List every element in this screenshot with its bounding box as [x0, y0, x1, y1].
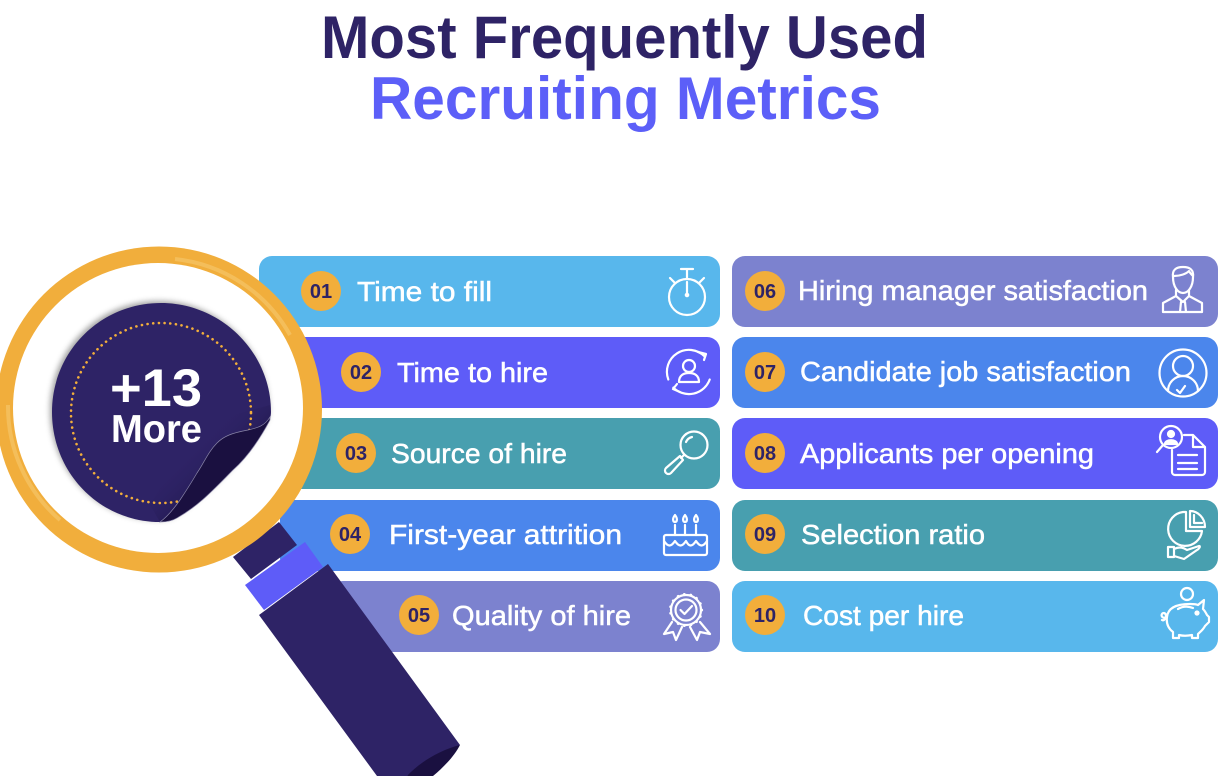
metric 06 hiring manager satisfaction: Hiring manager satisfaction: [798, 275, 1148, 306]
icon: cycle person: [667, 350, 710, 394]
sticker +13 more: [50, 301, 271, 522]
metric 02 time to hire: Time to hire: [397, 357, 548, 388]
title: Most Frequently Used: [321, 4, 928, 71]
icon: applicant document: [1157, 426, 1205, 475]
title: [321, 4, 928, 132]
metric 09 selection ratio: Selection ratio: [801, 519, 985, 550]
metric 05 quality of hire: Quality of hire: [452, 600, 631, 631]
metric 07 candidate job satisfaction: Candidate job satisfaction: [800, 356, 1131, 387]
metric 10 cost per hire: 10: [754, 605, 776, 627]
icon: magnifying glass: [665, 432, 708, 474]
metric 07 candidate job satisfaction: 07: [754, 362, 776, 384]
metric 10 cost per hire: [732, 581, 1218, 652]
magnifying glass: [0, 246, 460, 776]
metric 05 quality of hire: 05: [408, 605, 430, 627]
metric 02 time to hire: 02: [350, 362, 372, 384]
metric 03 source of hire: Source of hire: [391, 438, 567, 469]
icon: award rosette: [664, 594, 710, 640]
metric 01 time to fill: 01: [310, 281, 332, 303]
sticker text: More: [111, 408, 202, 451]
sticker text: [110, 359, 202, 451]
title: Recruiting Metrics: [370, 65, 881, 132]
metric 01 time to fill: Time to fill: [357, 276, 492, 307]
icon: manager: [1163, 267, 1202, 312]
icon: stopwatch: [669, 269, 705, 315]
icon: candidate: [1160, 350, 1206, 396]
panel: metrics 06 to 10: [732, 256, 1218, 652]
page curl: [160, 417, 270, 522]
handle: [233, 522, 460, 776]
metric 06 hiring manager satisfaction: [732, 256, 1218, 327]
metric 08 applicants per opening: Applicants per opening: [800, 438, 1094, 469]
metric 08 applicants per opening: [732, 418, 1218, 489]
metric 02 time to hire: [280, 337, 720, 408]
icon: pie chart in hand: [1168, 511, 1205, 559]
icon: piggy bank: [1162, 588, 1209, 638]
metric 06 hiring manager satisfaction: 06: [754, 281, 776, 303]
metric 05 quality of hire: [330, 581, 720, 652]
dotted ring: [71, 323, 251, 503]
metric 04 first-year attrition: First-year attrition: [389, 519, 622, 550]
metric 04 first-year attrition: [280, 500, 720, 571]
metric 09 selection ratio: [732, 500, 1218, 571]
lens ring: [0, 246, 322, 572]
panel: metrics 01 to 05: [259, 256, 720, 652]
metric 04 first-year attrition: 04: [339, 524, 362, 546]
sticker text: +13: [110, 359, 202, 418]
metric 10 cost per hire: Cost per hire: [803, 600, 964, 631]
metric 07 candidate job satisfaction: [732, 337, 1218, 408]
metric 09 selection ratio: 09: [754, 524, 776, 546]
metric 01 time to fill: [259, 256, 720, 327]
metric 08 applicants per opening: 08: [754, 443, 776, 465]
metric 03 source of hire: 03: [345, 443, 367, 465]
icon: birthday cake: [664, 515, 707, 555]
metric 03 source of hire: [280, 418, 720, 489]
